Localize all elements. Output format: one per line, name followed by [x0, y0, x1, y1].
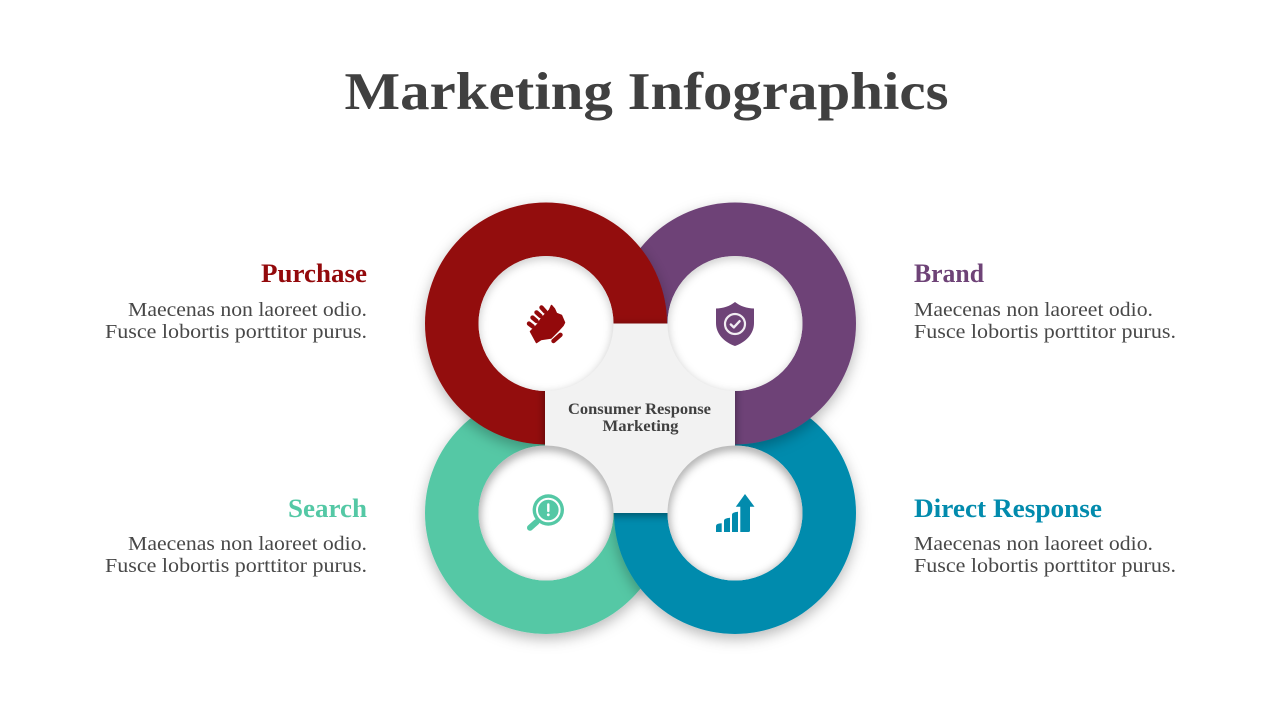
text block: direct response: Maecenas non laoreet odio.: [914, 533, 1153, 555]
title: Marketing Infographics: [344, 63, 948, 121]
text block: search: [105, 494, 368, 577]
text block: brand: Fusce lobortis porttitor purus.: [914, 321, 1176, 343]
ring: brand (purple): [614, 202, 856, 444]
hole: direct response: [664, 445, 806, 587]
center panel: [545, 324, 735, 513]
ring: purchase (red): [425, 202, 667, 444]
hole: purchase: [478, 256, 614, 391]
hole: search: [475, 445, 617, 587]
text block: search: Search: [288, 494, 368, 523]
ring: direct response (teal): [614, 392, 856, 634]
text block: purchase: Purchase: [261, 259, 367, 288]
text block: purchase: Fusce lobortis porttitor purus.: [105, 321, 367, 343]
icon: magnifier with alert: [530, 494, 564, 528]
text block: brand: Maecenas non laoreet odio.: [914, 299, 1153, 321]
icon: rising bars with arrow: [716, 494, 754, 532]
hole: brand: [668, 256, 802, 391]
center label: Marketing: [602, 418, 679, 435]
center label: Consumer Response: [568, 401, 711, 418]
ring: search (green): [425, 392, 667, 634]
text block: brand: Brand: [914, 259, 985, 288]
text block: purchase: Maecenas non laoreet odio.: [128, 299, 367, 321]
text block: direct response: [914, 494, 1176, 577]
text block: purchase: [105, 259, 367, 343]
diagram: four interlocking rings: [425, 202, 856, 634]
text block: search: Maecenas non laoreet odio.: [128, 533, 367, 555]
text block: search: Fusce lobortis porttitor purus.: [105, 555, 367, 577]
center label: [568, 401, 711, 435]
text block: direct response: Fusce lobortis porttitor purus.: [914, 555, 1176, 577]
text block: brand: [914, 259, 1176, 343]
icon: handshake fist: [529, 306, 564, 342]
text block: direct response: Direct Response: [914, 494, 1102, 523]
icon: shield with check: [716, 302, 754, 346]
